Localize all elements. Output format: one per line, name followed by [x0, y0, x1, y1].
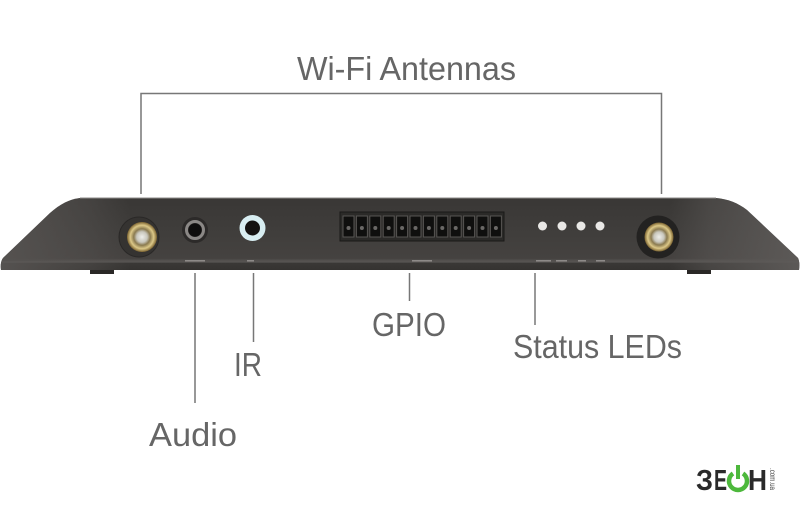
connector: right antenna	[636, 216, 680, 258]
logo: ZEON	[696, 465, 777, 497]
connector: IR jack	[240, 215, 266, 241]
device body	[1, 198, 799, 270]
logo: ZEON: .com.ua	[768, 468, 777, 490]
connector: left antenna	[119, 217, 159, 257]
connector: audio jack	[182, 217, 208, 243]
connector: GPIO terminal block	[340, 212, 504, 241]
logo: ZEON: Н	[748, 465, 767, 497]
label: GPIO: GPIO	[372, 306, 446, 343]
label: IR: IR	[234, 346, 262, 383]
logo: ZEON: З	[696, 465, 713, 497]
label: Status LEDs: Status LEDs	[513, 328, 682, 365]
device feet	[90, 268, 711, 274]
bracket: Wi-Fi antenna leader lines	[141, 94, 662, 194]
status LEDs	[538, 222, 604, 230]
heading: Wi-Fi Antennas: Wi-Fi Antennas	[297, 50, 516, 87]
leader lines	[195, 273, 535, 403]
silkscreen port labels	[185, 260, 605, 262]
label: Audio: Audio	[149, 416, 237, 453]
logo: ZEON: Е	[714, 465, 727, 497]
